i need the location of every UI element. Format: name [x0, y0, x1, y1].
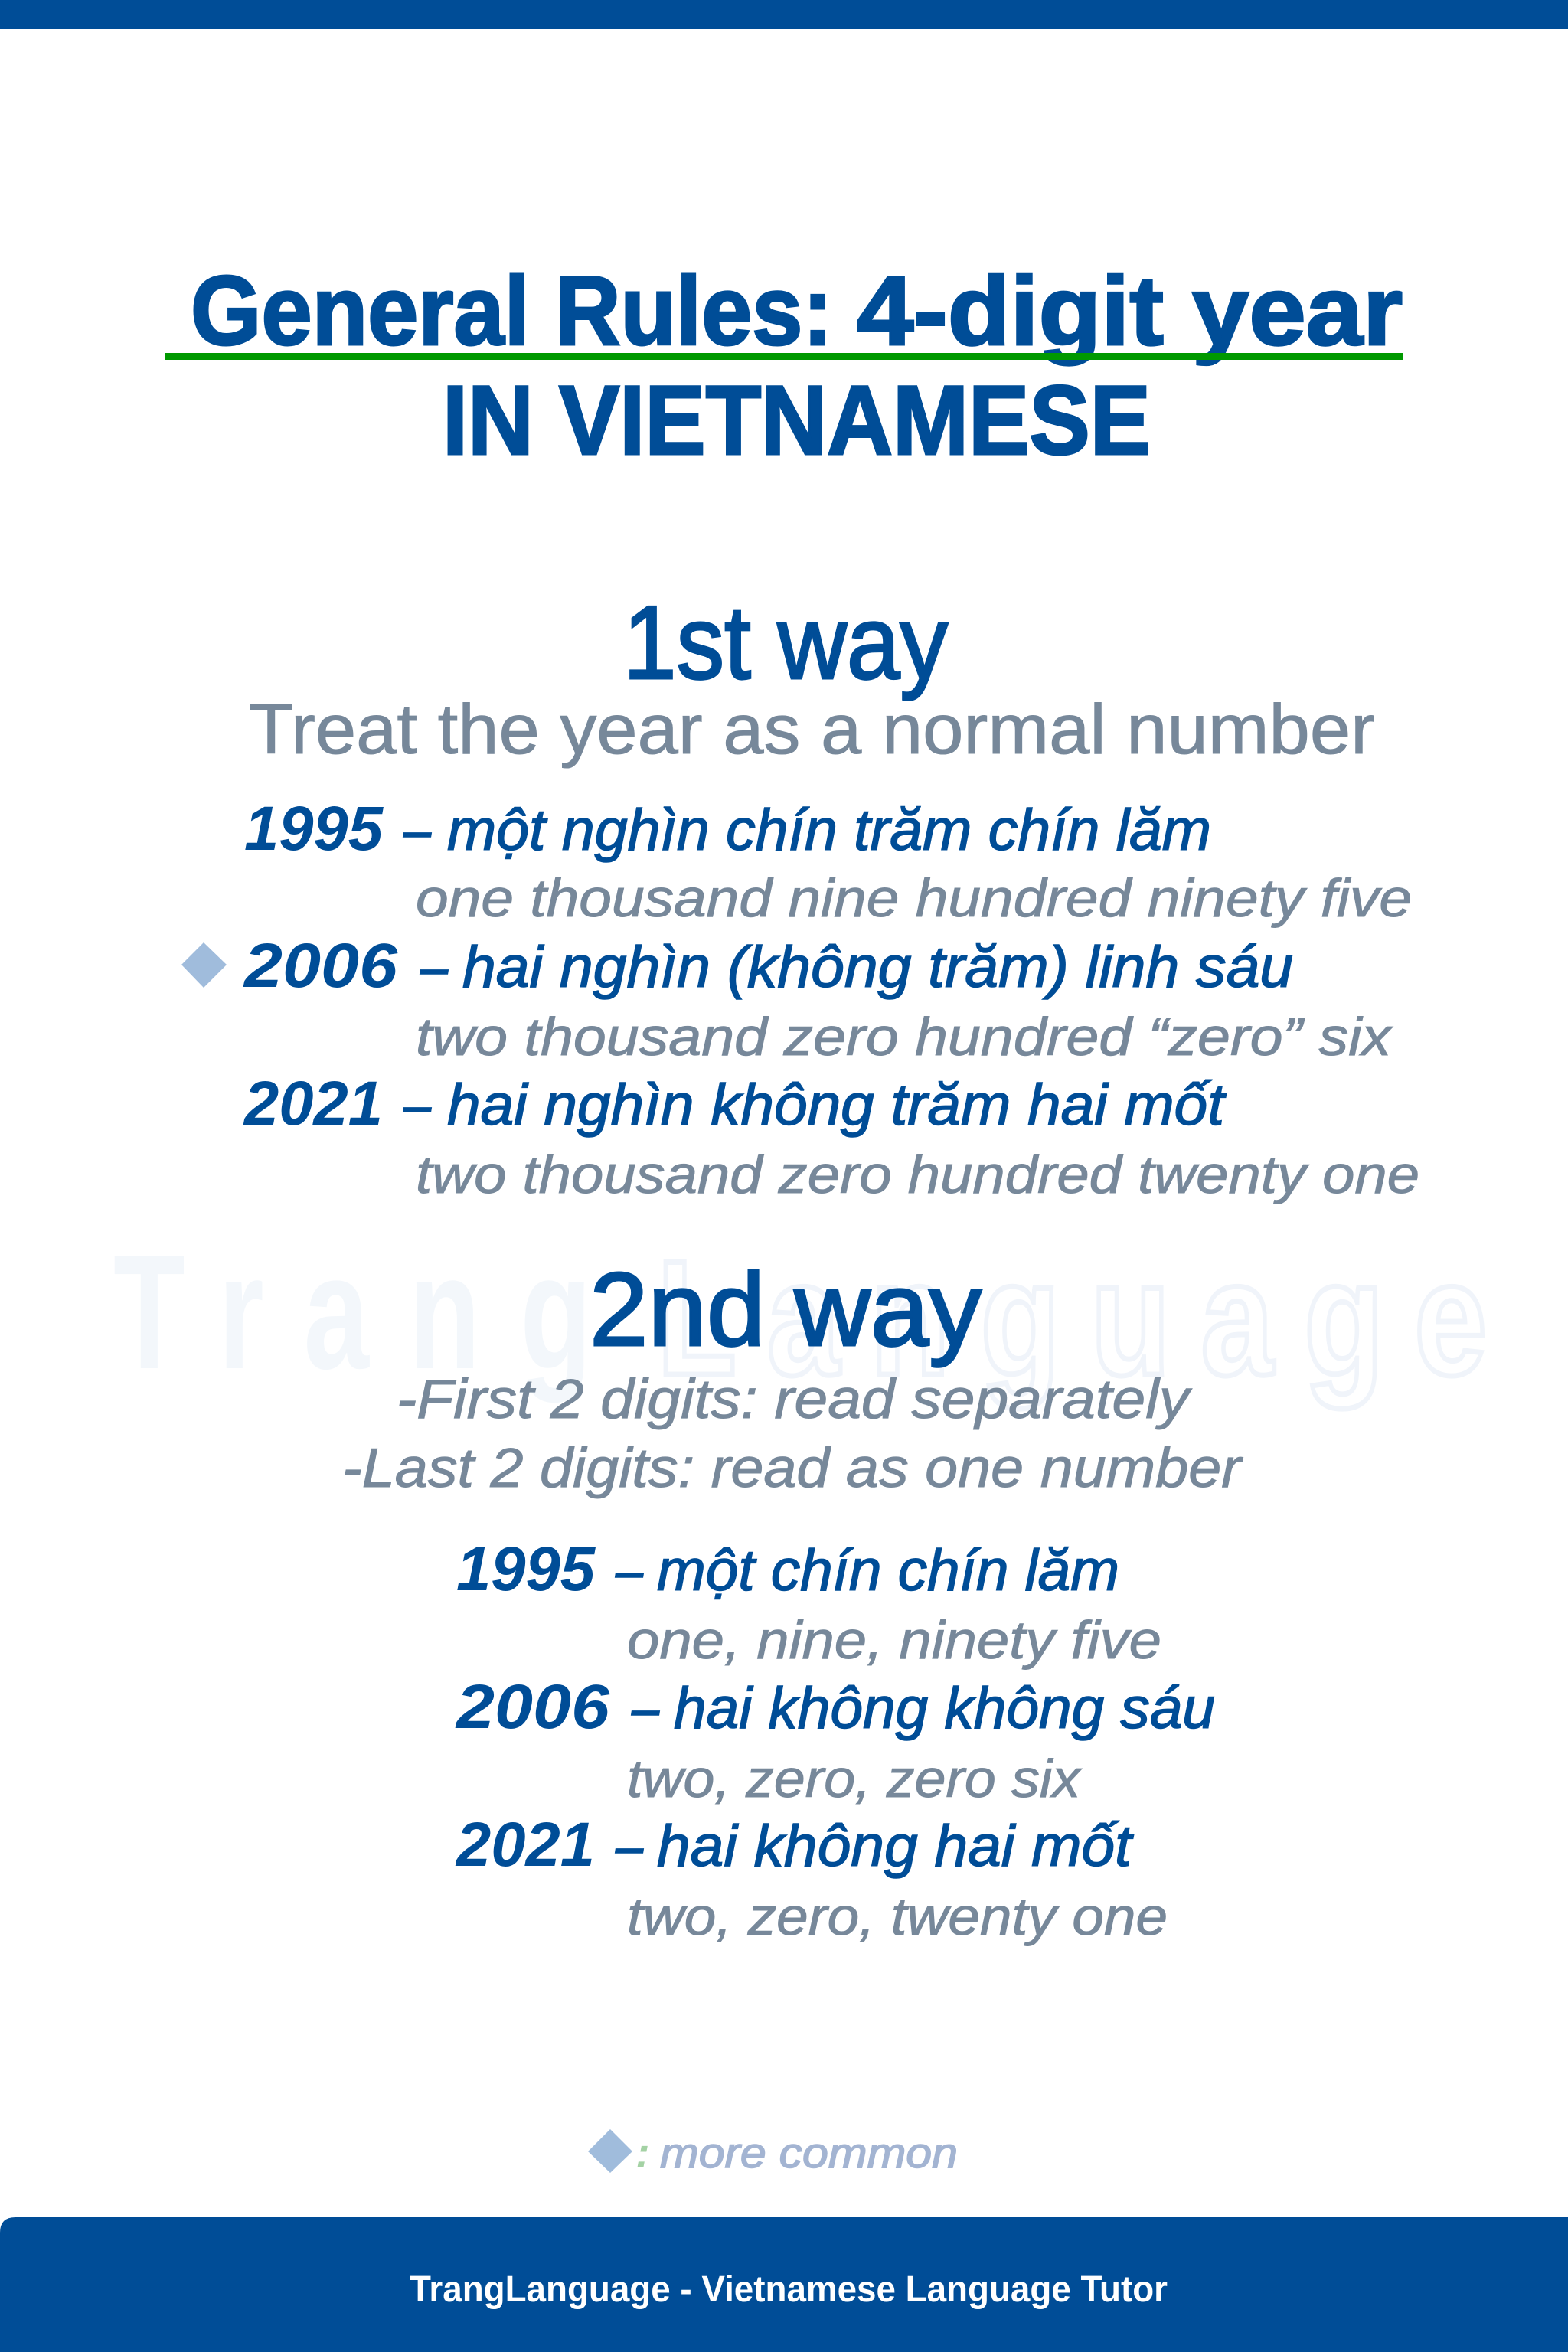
example 1995: một chín chín lăm [657, 1538, 1119, 1603]
icon: legend diamond [588, 2129, 632, 2173]
watermark: Trang: Trang [113, 1221, 592, 1403]
subheading: last 2 digits: -Last 2 digits: read as one number [342, 1438, 1243, 1499]
icon: diamond [181, 942, 227, 988]
example 2006: hai không không sáu [674, 1676, 1215, 1741]
title line 1 [191, 256, 1403, 366]
title line 2: IN VIETNAMESE [443, 366, 1151, 475]
example 2021: hai không hai mốt [657, 1814, 1134, 1879]
example 2006: 2006 [455, 1672, 611, 1742]
legend colon: : [635, 2128, 650, 2177]
example 1995 [456, 1534, 1161, 1670]
heading: 2nd way: 2nd way [590, 1251, 982, 1367]
example 2021 [243, 1069, 1419, 1204]
example 2021: hai nghìn không trăm hai mốt [447, 1073, 1227, 1138]
title line 1: General Rules: [191, 256, 833, 366]
legend text: more common [660, 2128, 958, 2177]
example 2021: two thousand zero hundred twenty one [416, 1145, 1419, 1204]
example 2006: two, zero, zero six [627, 1749, 1083, 1808]
example 2021: – [615, 1814, 644, 1879]
example 2006: – [631, 1676, 660, 1741]
title line 1: 4-digit year [857, 256, 1403, 366]
example 1995: 1995 [244, 794, 384, 864]
example 1995: 1995 [456, 1534, 596, 1604]
example 2006 [455, 1672, 1215, 1808]
footer [0, 2217, 1568, 2352]
title underline [165, 353, 1403, 360]
subheading: 1st way: Treat the year as a normal number [249, 691, 1375, 769]
watermark: Language: Language [657, 1227, 1487, 1409]
title [165, 256, 1403, 475]
example 1995: một nghìn chín trăm chín lăm [447, 798, 1211, 863]
example 1995 [244, 794, 1412, 928]
example 2006: hai nghìn (không trăm) linh sáu [462, 935, 1293, 1000]
footer bar [0, 2217, 1568, 2352]
panel: 1st way [181, 584, 1419, 1204]
example 2021: – [403, 1073, 432, 1138]
footer text: TrangLanguage - Vietnamese Language Tutor [410, 2269, 1168, 2310]
example 2021: 2021 [243, 1069, 383, 1138]
example 2006: 2006 [243, 931, 399, 1001]
legend [588, 2128, 958, 2177]
heading: 1st way: 1st way [623, 584, 948, 701]
example 2021: 2021 [455, 1810, 595, 1880]
example 2021: two, zero, twenty one [627, 1886, 1168, 1946]
example 2006 [243, 931, 1393, 1067]
example 2006: – [420, 935, 449, 1000]
example 1995: – [615, 1538, 644, 1603]
example 2006: two thousand zero hundred “zero” six [416, 1007, 1393, 1067]
example 2021 [455, 1810, 1168, 1946]
example 1995: – [403, 798, 432, 863]
watermark [113, 1221, 1487, 1409]
example 1995: one, nine, ninety five [627, 1610, 1161, 1670]
panel: 2nd way [342, 1251, 1243, 1946]
top bar [0, 0, 1568, 29]
subheading: first 2 digits: -First 2 digits: read separately [397, 1369, 1192, 1430]
example 1995: one thousand nine hundred ninety five [416, 868, 1412, 928]
